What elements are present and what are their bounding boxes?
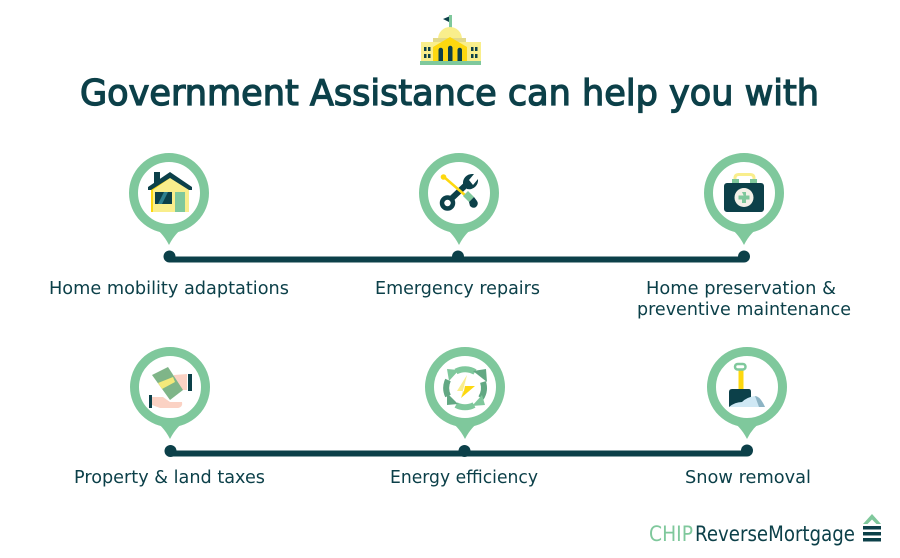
pin: emergency repairs <box>424 158 494 245</box>
label: home preservation and preventive maintenance: Home preservation & <box>646 279 836 299</box>
timeline: top row <box>164 250 750 262</box>
logo: CHIP Reverse Mortgage <box>649 514 881 546</box>
pin: home mobility adaptations <box>134 158 204 245</box>
timeline: bottom row <box>164 444 753 457</box>
label: home mobility adaptations: Home mobility adaptations <box>49 279 289 299</box>
logo: CHIP Reverse Mortgage: CHIP <box>649 522 693 546</box>
pin: property and land taxes <box>134 352 206 439</box>
icon: energy cycle <box>446 369 487 407</box>
icon: government building <box>420 15 481 65</box>
label: home preservation and preventive maintenance: preventive maintenance <box>637 300 851 320</box>
label: snow removal: Snow removal <box>685 468 811 488</box>
label: energy efficiency: Energy efficiency <box>390 468 538 488</box>
icon: first aid kit <box>724 174 764 212</box>
icon: money exchange <box>149 367 192 408</box>
label: property and land taxes: Property & land taxes <box>74 468 265 488</box>
pin: energy efficiency <box>430 352 500 439</box>
label: emergency repairs: Emergency repairs <box>375 279 540 299</box>
icon: wrench and screwdriver <box>441 174 478 208</box>
pin: home preservation <box>708 158 780 245</box>
icon: snow shovel <box>729 364 765 407</box>
icon: house <box>148 172 192 212</box>
pin: snow removal <box>712 352 782 439</box>
logo: CHIP Reverse Mortgage: ReverseMortgage <box>695 522 855 546</box>
label: home preservation and preventive maintenance <box>637 279 851 320</box>
title: Government Assistance can help you with <box>80 73 819 114</box>
